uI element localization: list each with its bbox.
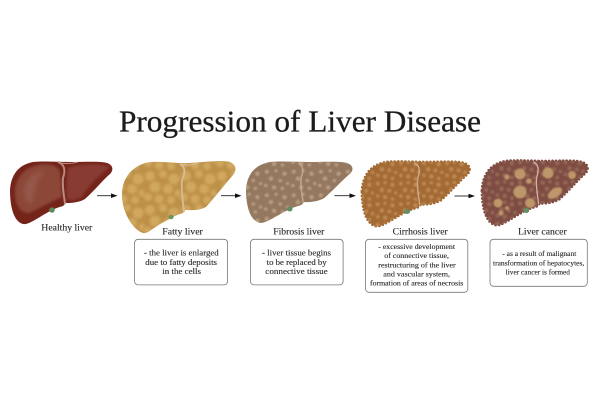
panel: liver cancer description: liver cancer is formed xyxy=(506,269,571,277)
arrow: cirrhosis to cancer xyxy=(454,194,475,198)
panel: liver cancer description: transformation of hepatocytes, xyxy=(493,260,585,268)
arrow: fatty to fibrosis xyxy=(221,193,242,198)
icon: fatty liver xyxy=(122,161,236,234)
panel: fibrosis liver description: - liver tissue begins xyxy=(262,249,331,258)
panel: fatty liver description: due to fatty deposits xyxy=(145,258,217,267)
icon: healthy liver xyxy=(10,162,112,224)
label: cirrhosis liver: Cirrhosis liver xyxy=(393,227,448,237)
arrow: healthy to fatty xyxy=(97,193,118,198)
panel: cirrhosis liver description: of connective tissue, xyxy=(384,252,449,260)
panel: cirrhosis liver description: - excessive development xyxy=(378,243,455,251)
panel: fatty liver description: - the liver is enlarged xyxy=(144,249,219,258)
label: fibrosis liver: Fibrosis liver xyxy=(273,227,324,237)
panel: fibrosis liver description: to be replaced by xyxy=(267,258,327,267)
panel: liver cancer description: - as a result of malignant xyxy=(502,250,576,258)
panel: fatty liver description: in the cells xyxy=(162,267,201,276)
panel: fibrosis liver description: connective tissue xyxy=(265,267,328,276)
icon: cirrhosis liver xyxy=(360,160,471,228)
panel: fibrosis liver description xyxy=(250,239,343,285)
icon: liver cancer xyxy=(480,159,589,226)
arrow: fibrosis to cirrhosis xyxy=(334,193,356,198)
panel: cirrhosis liver description xyxy=(366,239,468,292)
icon: fibrosis liver xyxy=(246,162,352,223)
label: healthy liver: Healthy liver xyxy=(41,222,92,232)
panel: cirrhosis liver description: restructuring of the liver xyxy=(378,261,456,269)
title: Progression of Liver Disease xyxy=(119,104,481,138)
panel: liver cancer description xyxy=(490,239,587,286)
panel: fatty liver description xyxy=(135,239,228,285)
label: fatty liver: Fatty liver xyxy=(162,227,203,237)
panel: cirrhosis liver description: and vascular system, xyxy=(383,271,450,279)
label: liver cancer: Liver cancer xyxy=(518,227,567,237)
panel: cirrhosis liver description: formation of areas of necrosis xyxy=(370,279,464,287)
